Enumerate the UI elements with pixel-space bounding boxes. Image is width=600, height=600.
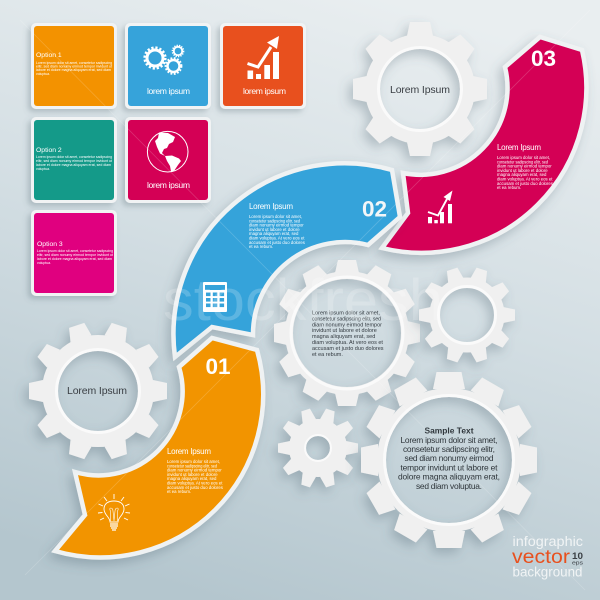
- gear: small solid: [278, 408, 358, 488]
- panel: arc 01: magna aliquyam erat, sed: [167, 476, 217, 481]
- panel: gears card: [125, 23, 211, 109]
- panel: arc 03: 03: [531, 46, 556, 71]
- gear: middle with text: et ea rebum.: [312, 352, 343, 358]
- panel: option 3 card: Option 3: [37, 241, 63, 248]
- gear: big with sample text: tempor invidunt ut labore et: [400, 462, 498, 472]
- panel: arc 02: invidunt ut labore et dolore: [249, 227, 300, 232]
- panel: arc 01: 01: [206, 354, 231, 379]
- panel: arc 01: diam voluptua. At vero eos et: [167, 480, 223, 486]
- panel: option 3 card: [31, 210, 117, 296]
- panel: arc 02: diam nonumy eirmod tempor: [249, 223, 304, 228]
- panel: option 1 card: Lorem ipsum dolor sit amet, consetetur sadipscing: [36, 61, 112, 65]
- panel: arc 02: [173, 163, 400, 357]
- panel: option 2 card: [31, 117, 117, 203]
- gear: middle with text: [274, 260, 420, 406]
- panel: arc 03: magna aliquyam erat, sed: [497, 172, 547, 177]
- icon: light bulb: [98, 494, 130, 530]
- icon: growth chart: [248, 36, 279, 79]
- gear: top with label: [353, 22, 487, 156]
- panel: arc 01: diam nonumy eirmod tempor: [167, 468, 222, 473]
- gear: middle with text: accusam et justo duo dolores: [312, 346, 384, 352]
- gear: middle with text: Lorem ipsum dolor sit amet,: [312, 310, 380, 316]
- icon: calculator: [203, 282, 227, 312]
- panel: option 1 card: labore et dolore magna aliquyam erat, sed diam: [36, 68, 111, 72]
- panel: arc 01: Lorem ipsum dolor sit amet,: [167, 459, 220, 464]
- gear: big with sample text: [361, 372, 537, 548]
- icon: globe: [147, 131, 188, 172]
- panel: option 2 card: voluptua.: [36, 167, 50, 171]
- caption: infographic vector background: eps: [572, 560, 583, 566]
- panel: arc 02: et ea rebum.: [249, 244, 273, 249]
- watermark: stockfresh: [163, 268, 443, 333]
- caption: infographic vector background: vector: [512, 546, 571, 568]
- gear: middle with text: diam nonumy eirmod tempor: [312, 322, 382, 328]
- gear: middle with text: magna aliquyam erat, sed: [312, 334, 375, 340]
- panel: option 2 card: elitr, sed diam nonumy eirmod tempor invidunt ut: [36, 159, 112, 163]
- gear: middle with text: consetetur sadipscing elitr, sed: [312, 316, 381, 322]
- panel: arc 02: accusam et justo duo dolores: [249, 240, 305, 245]
- panel: arc 03: [382, 37, 586, 253]
- panel: option 1 card: elitr, sed diam nonumy eirmod tempor invidunt ut: [36, 65, 112, 69]
- gear: big with sample text: consetetur sadipscing elitr,: [403, 444, 495, 454]
- panel: arc 02: diam voluptua. At vero eos et: [249, 236, 305, 240]
- gear: big with sample text: Lorem ipsum dolor sit amet,: [400, 435, 498, 445]
- gear: big with sample text: dolore magna aliquyam erat,: [398, 472, 500, 482]
- panel: chart card: lorem ipsum: [243, 86, 286, 96]
- gear: big with sample text: Sample Text: [424, 426, 474, 436]
- panel: option 1 card: [31, 23, 117, 109]
- panel: option 1 card: voluptua.: [36, 72, 50, 76]
- panel: arc 01: Lorem Ipsum: [167, 447, 211, 456]
- icon: growth chart small: [428, 190, 452, 223]
- panel: arc 03: diam voluptua. At vero eos et: [497, 176, 553, 182]
- panel: globe card: [125, 117, 211, 203]
- panel: arc 03: diam nonumy eirmod tempor: [497, 164, 552, 169]
- panel: arc 01: accusam et justo duo dolores: [167, 485, 223, 490]
- panel: arc 02: magna aliquyam erat, sed: [249, 231, 299, 236]
- panel: option 2 card: Option 2: [36, 147, 62, 154]
- gear: top with label: Lorem Ipsum: [390, 84, 450, 96]
- gear: big with sample text: sed diam voluptua.: [416, 481, 482, 491]
- panel: option 2 card: labore et dolore magna aliquyam erat, sed diam: [36, 163, 111, 167]
- panel: arc 03: et ea rebum.: [497, 185, 521, 190]
- panel: gears card: lorem ipsum: [147, 86, 190, 96]
- gear: middle with text: invidunt ut labore et dolore: [312, 328, 377, 334]
- gear: big with sample text: sed diam nonumy eirmod: [404, 453, 494, 463]
- panel: arc 03: invidunt ut labore et dolore: [497, 168, 548, 173]
- panel: arc 01: consetetur sadipscing elitr, sed: [167, 463, 218, 468]
- panel: arc 02: 02: [362, 197, 387, 222]
- panel: arc 03: Lorem Ipsum: [497, 143, 541, 152]
- panel: arc 02: Lorem ipsum dolor sit amet,: [249, 214, 302, 219]
- panel: option 2 card: Lorem ipsum dolor sit amet, consetetur sadipscing: [36, 155, 112, 159]
- panel: globe card: lorem ipsum: [147, 180, 190, 190]
- icon: three gears: [145, 46, 184, 74]
- panel: chart card: [220, 23, 306, 109]
- panel: option 1 card: Option 1: [36, 52, 62, 59]
- panel: arc 03: Lorem ipsum dolor sit amet,: [497, 155, 550, 160]
- caption: infographic vector background: 10: [572, 551, 583, 561]
- panel: option 3 card: voluptua.: [37, 261, 51, 265]
- gear: middle with text: diam voluptua. At vero eos et: [312, 340, 383, 346]
- panel: arc 01: et ea rebum.: [167, 489, 191, 494]
- panel: arc 02: Lorem Ipsum: [249, 202, 293, 211]
- panel: arc 02: consetetur sadipscing elitr, sed: [249, 218, 301, 223]
- gear: left with label: [29, 322, 167, 460]
- caption: infographic vector background: infographic: [512, 534, 583, 549]
- caption: infographic vector background: background: [512, 564, 582, 580]
- panel: arc 03: consetetur sadipscing elitr, sed: [497, 159, 549, 164]
- panel: arc 01: [55, 338, 263, 557]
- gear: left with label: Lorem Ipsum: [67, 385, 127, 397]
- panel: arc 01: invidunt ut labore et dolore: [167, 472, 218, 477]
- caption: infographic vector background: [512, 534, 583, 580]
- panel: arc 03: accusam et justo duo dolores: [497, 181, 553, 186]
- panel: option 3 card: elitr, sed diam nonumy eirmod tempor invidunt ut: [37, 253, 113, 257]
- panel: option 3 card: labore et dolore magna aliquyam erat, sed diam: [37, 257, 112, 261]
- gear: small right: [419, 267, 515, 363]
- panel: option 3 card: Lorem ipsum dolor sit amet, consetetur sadipscing: [37, 249, 113, 253]
